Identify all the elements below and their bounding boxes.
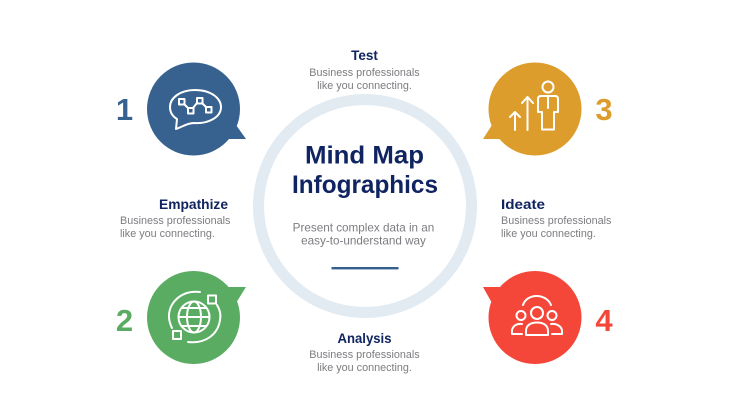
text block: Ideate: Business professionals [501, 215, 612, 227]
center description: easy-to-understand way [301, 234, 426, 248]
center description: Present complex data in an [293, 222, 434, 234]
text block: Analysis: Analysis [338, 331, 392, 346]
number 3: 3 [595, 92, 613, 127]
text block: Analysis [309, 331, 420, 374]
bubble: step 2 [147, 271, 246, 364]
bubble: step 3 [483, 62, 582, 156]
number 2: 2 [116, 303, 133, 338]
text block: Empathize: Empathize [159, 197, 229, 212]
text block: Test [309, 48, 420, 92]
number 4: 4 [595, 303, 613, 338]
icon: person with rising arrows [510, 82, 558, 130]
bubble: step 1 [147, 62, 246, 156]
text block: Empathize: like you connecting. [120, 228, 215, 240]
central ring [258, 100, 472, 312]
center title: Mind Map [305, 142, 424, 170]
text block: Analysis: Business professionals [309, 349, 420, 361]
text block: Empathize [120, 197, 231, 240]
bubble: step 4 [483, 271, 582, 364]
icon: speech bubble with nodes [170, 90, 221, 129]
number 1: 1 [116, 92, 133, 127]
center title [292, 142, 438, 199]
text block: Empathize: Business professionals [120, 215, 231, 227]
center description [293, 222, 434, 248]
text block: Ideate [501, 197, 612, 240]
icon: group of people [512, 296, 562, 335]
center title: Infographics [292, 171, 438, 199]
text block: Ideate: Ideate [501, 197, 546, 212]
center underline [332, 267, 398, 269]
icon: globe with orbit [169, 292, 220, 342]
text block: Test: Business professionals [309, 67, 420, 79]
text block: Analysis: like you connecting. [317, 362, 412, 374]
text block: Test: Test [351, 48, 378, 63]
text block: Test: like you connecting. [317, 80, 412, 92]
text block: Ideate: like you connecting. [501, 228, 596, 240]
